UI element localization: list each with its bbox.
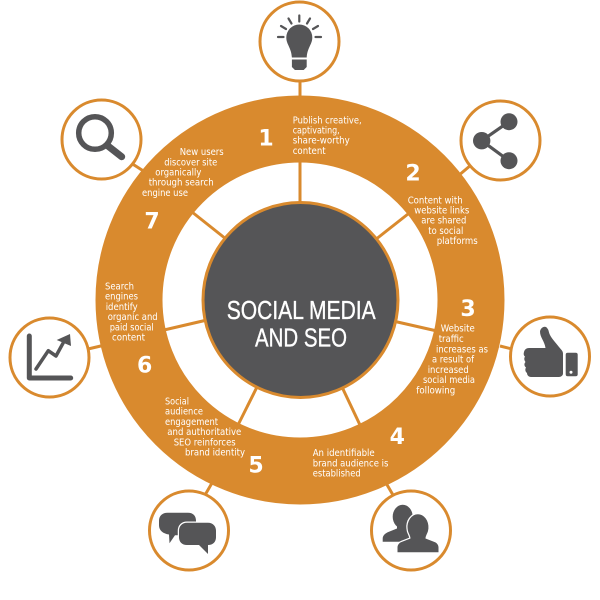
step 6: organic and: [108, 312, 158, 323]
step 5: brand identity: [185, 447, 245, 458]
title: SOCIAL MEDIA: [227, 297, 376, 325]
step 5: Social: [165, 396, 189, 407]
step 2: Content with: [408, 196, 463, 206]
step 2: are shared: [421, 216, 466, 227]
icon: magnifying glass: [62, 100, 141, 179]
step 1: content: [293, 146, 326, 157]
icon: speech bubbles: [150, 491, 228, 570]
step 1: 1: [258, 127, 274, 152]
step 5: 5: [248, 454, 264, 479]
step 3: traffic: [439, 334, 464, 345]
step 5: engagement: [165, 417, 218, 428]
step 3: increased: [428, 365, 469, 376]
step 6: 6: [137, 354, 152, 379]
orange ring: [129, 129, 471, 471]
step 3: [416, 297, 488, 396]
step 1: [258, 116, 362, 157]
step 2: 2: [405, 162, 421, 187]
icon: thumbs up: [510, 317, 590, 396]
step 4: established: [313, 469, 361, 480]
step 7: organically: [155, 167, 202, 178]
title: [227, 297, 376, 352]
step 1: Publish creative,: [293, 116, 362, 126]
icon: audience people: [372, 491, 450, 570]
step 3: Website: [441, 324, 475, 335]
step 4: 4: [390, 425, 405, 450]
icon: growth chart: [10, 318, 89, 397]
step 6: identify: [106, 302, 138, 313]
step 5: SEO reinforces: [174, 437, 236, 448]
step 3: 3: [460, 297, 476, 322]
title: AND SEO: [255, 324, 347, 352]
step 5: audience: [165, 407, 203, 418]
step 6: engines: [105, 292, 138, 303]
step 7: New users: [180, 147, 224, 158]
step 6: paid social: [110, 322, 154, 333]
step 4: [313, 425, 405, 480]
spokes from centre to ring: [164, 160, 437, 425]
step 1: captivating,: [293, 126, 340, 136]
step 2: [405, 162, 478, 247]
step 2: to social: [428, 226, 463, 237]
step 4: brand audience is: [313, 458, 388, 469]
step 6: content: [112, 333, 145, 344]
step 5: and authoritative: [167, 427, 242, 438]
step 7: engine use: [142, 188, 188, 199]
step 2: platforms: [437, 236, 478, 247]
step 6: [105, 281, 158, 379]
centre circle with title: [203, 202, 398, 398]
step 7: discover site: [164, 157, 217, 168]
step 3: social media: [423, 375, 475, 386]
step 2: website links: [414, 206, 469, 216]
step 3: a result of: [432, 355, 475, 366]
connectors between ring and icons: [88, 80, 512, 495]
icon: light bulb: [260, 2, 339, 81]
step 3: following: [416, 385, 455, 396]
step 1: share-worthy: [293, 136, 350, 147]
step 5: [165, 396, 264, 479]
step 3: increases as: [436, 344, 488, 355]
step 7: through search: [149, 178, 214, 189]
step 7: 7: [144, 210, 160, 235]
step 6: Search: [105, 281, 134, 292]
icon: share: [461, 101, 540, 180]
step 7: [142, 147, 224, 235]
step 4: An identifiable: [313, 448, 375, 459]
